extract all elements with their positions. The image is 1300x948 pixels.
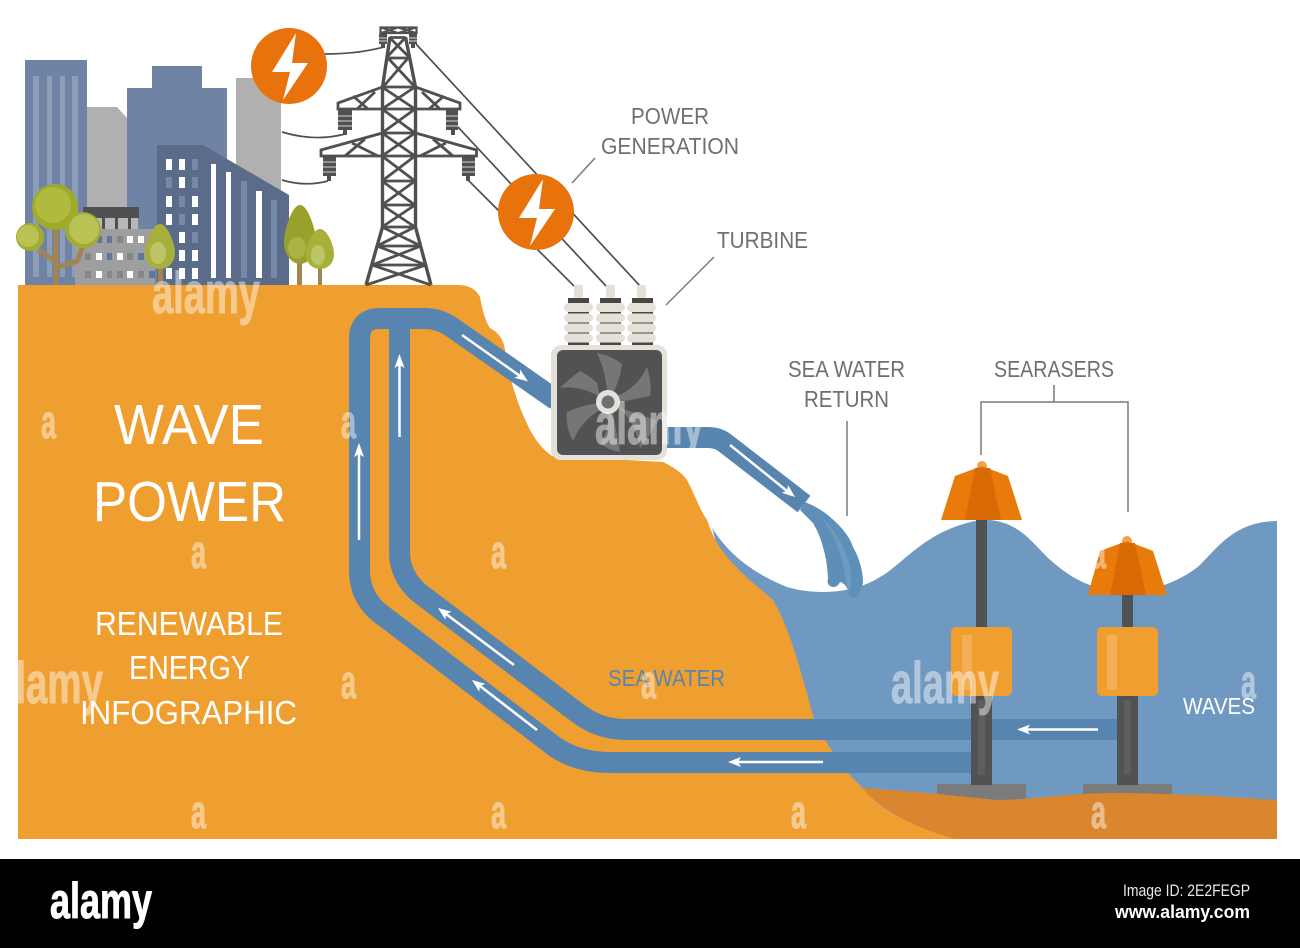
power lines to city — [282, 47, 384, 184]
subtitle — [80, 605, 297, 731]
label: power generation: GENERATION — [601, 133, 739, 159]
city skyline — [25, 60, 289, 285]
watermarks: a — [41, 395, 56, 448]
watermarks: a — [1091, 525, 1106, 578]
title: WAVE — [114, 393, 264, 457]
subtitle: RENEWABLE — [95, 605, 283, 642]
label: sea water return: SEA WATER — [788, 356, 905, 382]
seabed — [860, 788, 1277, 839]
subtitle: ENERGY — [129, 649, 250, 686]
watermarks: a — [191, 785, 206, 838]
watermarks: a — [1091, 785, 1106, 838]
footer band — [0, 859, 1300, 948]
power lines to turbine — [416, 44, 640, 286]
title — [93, 393, 286, 534]
watermarks: a — [341, 395, 356, 448]
watermarks: alamy — [891, 651, 999, 716]
watermarks: a — [641, 655, 656, 708]
turbine — [551, 285, 667, 460]
return water outflow — [800, 502, 863, 598]
watermarks: a — [791, 785, 806, 838]
searaser 1 — [941, 461, 1022, 785]
watermarks: a — [1241, 655, 1256, 708]
watermarks — [0, 261, 1256, 838]
transmission tower — [321, 28, 476, 285]
sea water pipes — [360, 318, 1117, 762]
icon: power bolt at city — [251, 28, 327, 104]
label: waves: WAVES — [1183, 693, 1255, 719]
searaser foundation bases — [937, 784, 1172, 801]
icon: power bolt at generation — [498, 174, 574, 250]
label: power generation — [601, 103, 739, 159]
land cross-section — [18, 285, 955, 839]
searaser 2 — [1088, 536, 1167, 785]
watermarks: a — [491, 785, 506, 838]
watermarks: a — [341, 655, 356, 708]
insulators — [564, 285, 656, 345]
watermarks: a — [191, 525, 206, 578]
trees — [16, 184, 334, 285]
image id: Image ID: 2E2FEGP — [1123, 881, 1250, 900]
flow arrows in pipes — [354, 335, 1098, 767]
title: POWER — [93, 470, 286, 534]
fan blades — [560, 353, 656, 452]
label: sea water return: RETURN — [804, 386, 889, 412]
watermarks: a — [491, 525, 506, 578]
footer logo: alamy — [50, 873, 152, 929]
subtitle: INFOGRAPHIC — [80, 694, 297, 731]
watermarks: alamy — [152, 261, 260, 326]
leader lines — [572, 158, 1128, 516]
sea water body — [712, 520, 1277, 838]
label: sea water return — [788, 356, 905, 412]
website: www.alamy.com — [1114, 902, 1250, 922]
watermarks: alamy — [595, 392, 704, 457]
label: sea water: SEA WATER — [608, 665, 725, 691]
label: searasers: SEARASERS — [994, 356, 1114, 382]
label: turbine: TURBINE — [717, 227, 808, 253]
return pipe arrow — [730, 445, 795, 497]
sea water return pipe — [665, 438, 804, 504]
label: power generation: POWER — [631, 103, 709, 129]
